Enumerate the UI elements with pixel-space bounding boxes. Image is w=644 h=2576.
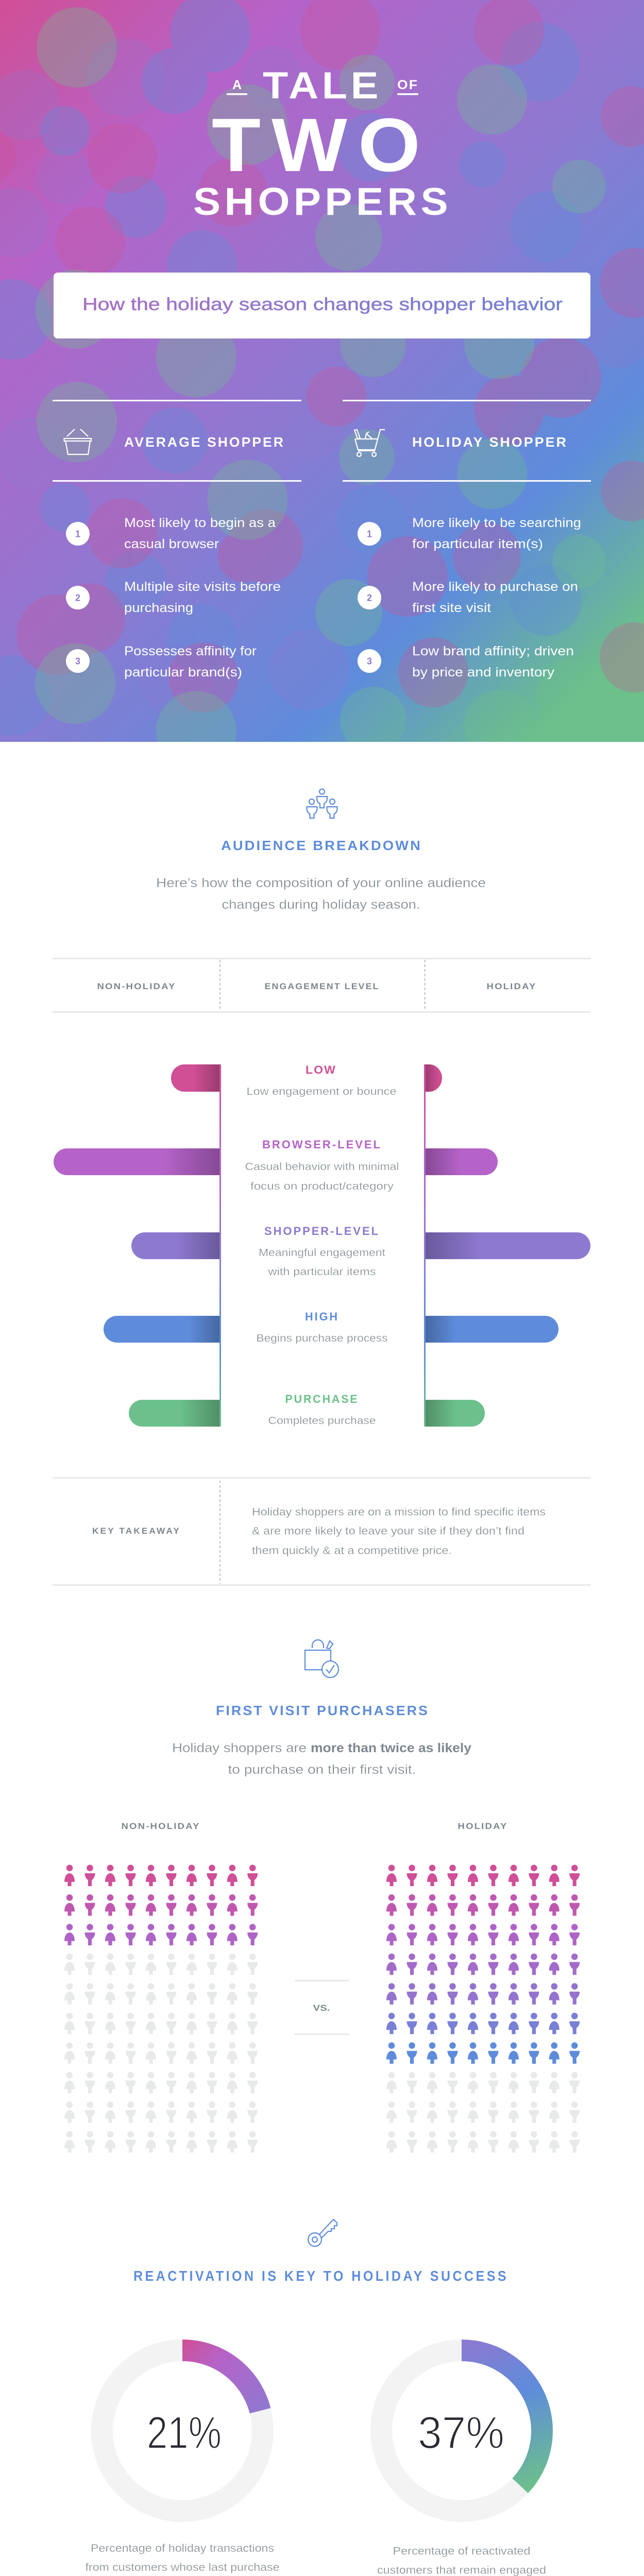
chart: donut 21% xyxy=(86,2350,279,2576)
title: TWO xyxy=(212,103,431,188)
chart: non-holiday pictogram: NON-HOLIDAY xyxy=(122,1821,200,1831)
labels: engagement levels: BROWSER-LEVEL xyxy=(262,1138,382,1151)
panel: average shopper: purchasing xyxy=(124,601,193,615)
panel: key takeaway: KEY TAKEAWAY xyxy=(92,1526,181,1536)
panel: average shopper: 3 xyxy=(75,656,80,667)
panel: holiday shopper: More likely to be searching xyxy=(412,516,581,530)
panel: average shopper: Most likely to begin as a xyxy=(124,516,276,530)
title: SHOPPERS xyxy=(193,180,452,223)
title: A xyxy=(232,78,242,92)
panel: average shopper: 1 xyxy=(75,529,80,539)
heading: first visit purchasers: FIRST VISIT PURCHASERS xyxy=(216,1703,429,1718)
chart: donut 37%: Percentage of reactivated xyxy=(393,2545,531,2557)
table header xyxy=(53,958,591,1013)
chart: donut 37%: 37% xyxy=(418,2407,504,2458)
versus divider: VS. xyxy=(313,2003,330,2013)
panel: hero background xyxy=(0,0,644,742)
panel: holiday shopper xyxy=(343,400,591,680)
panel: holiday shopper: 2 xyxy=(367,592,372,603)
panel: holiday shopper: More likely to purchase on xyxy=(412,580,578,594)
title xyxy=(193,65,452,223)
panel: holiday shopper: first site visit xyxy=(412,601,491,615)
table header: NON-HOLIDAY xyxy=(97,981,176,991)
panel: holiday shopper: 1 xyxy=(367,529,372,539)
bar: low xyxy=(171,1064,442,1092)
panel: average shopper: Possesses affinity for xyxy=(124,644,257,658)
panel: key takeaway xyxy=(53,1477,591,1586)
panel: average shopper: AVERAGE SHOPPER xyxy=(124,434,285,450)
chart: non-holiday pictogram xyxy=(64,1821,258,2153)
icon: cart xyxy=(354,430,385,456)
panel: average shopper: casual browser xyxy=(124,537,219,551)
panel: average shopper: particular brand(s) xyxy=(124,665,242,680)
labels: engagement levels: Begins purchase process xyxy=(257,1333,387,1344)
chart: donut 37% xyxy=(377,2350,546,2576)
text: audience intro: changes during holiday season. xyxy=(222,897,420,912)
text: audience intro xyxy=(156,876,486,912)
title: TALE xyxy=(263,65,382,107)
labels: engagement levels: LOW xyxy=(306,1063,336,1076)
panel: average shopper xyxy=(53,400,301,680)
bar: shopper-level xyxy=(131,1232,590,1259)
table header: HOLIDAY xyxy=(486,981,537,991)
title: OF xyxy=(397,78,418,92)
bar: purchase xyxy=(129,1400,485,1427)
icon: shopping bag with check xyxy=(305,1640,338,1677)
labels: engagement levels: with particular items xyxy=(267,1266,376,1278)
heading: audience breakdown: AUDIENCE BREAKDOWN xyxy=(221,838,422,853)
chart: holiday pictogram xyxy=(386,1821,580,2153)
panel: holiday shopper: HOLIDAY SHOPPER xyxy=(412,434,568,450)
labels: engagement levels: PURCHASE xyxy=(285,1393,359,1405)
panel: average shopper: 2 xyxy=(75,592,80,603)
subtitle card: How the holiday season changes shopper behavior xyxy=(82,295,563,314)
subtitle card xyxy=(54,273,590,338)
labels: engagement levels: Casual behavior with minimal xyxy=(245,1161,399,1173)
panel: holiday shopper: Low brand affinity; driven xyxy=(412,644,574,658)
text: first visit intro: Holiday shoppers are xyxy=(172,1741,307,1755)
panel: average shopper: Multiple site visits before xyxy=(124,580,281,594)
versus divider xyxy=(295,1980,349,2035)
table header: ENGAGEMENT LEVEL xyxy=(265,981,379,991)
labels: engagement levels: Low engagement or bounce xyxy=(246,1086,397,1097)
labels: engagement levels: HIGH xyxy=(305,1310,339,1323)
labels: engagement levels: focus on product/category xyxy=(250,1181,394,1192)
chart: donut 21%: from customers whose last purchase xyxy=(86,2562,279,2573)
text: first visit intro xyxy=(172,1741,471,1777)
heading: reactivation: REACTIVATION IS KEY TO HOLIDAY SUCCESS xyxy=(133,2268,509,2284)
labels: engagement levels: SHOPPER-LEVEL xyxy=(264,1225,380,1238)
panel: key takeaway: Holiday shoppers are on a mission to find specific items xyxy=(252,1506,546,1518)
chart: donut 21%: Percentage of holiday transactions xyxy=(91,2543,274,2554)
panel: key takeaway: & are more likely to leave your site if they don’t find xyxy=(252,1525,524,1537)
bar: browser-level xyxy=(54,1148,498,1175)
chart: engagement level butterfly bars xyxy=(54,1063,590,1427)
text: first visit intro: more than twice as likely xyxy=(311,1741,471,1755)
panel: key takeaway: them quickly & at a competitive price. xyxy=(252,1545,452,1557)
labels: engagement levels: Completes purchase xyxy=(268,1415,376,1427)
icon: basket xyxy=(64,429,91,454)
labels: engagement levels: Meaningful engagement xyxy=(259,1247,385,1259)
text: audience intro: Here’s how the composition of your online audience xyxy=(156,876,486,890)
chart: donut 21%: 21% xyxy=(147,2407,222,2458)
panel: holiday shopper: by price and inventory xyxy=(412,665,555,680)
labels: engagement levels xyxy=(245,1063,399,1427)
text: first visit intro: to purchase on their first visit. xyxy=(228,1762,416,1777)
icon: audience people xyxy=(307,789,337,818)
icon: key xyxy=(308,2219,337,2246)
chart: holiday pictogram: HOLIDAY xyxy=(457,1821,508,1831)
bar: high xyxy=(104,1316,558,1343)
chart: donut 37%: customers that remain engaged xyxy=(377,2565,546,2576)
panel: holiday shopper: for particular item(s) xyxy=(412,537,543,551)
panel: holiday shopper: 3 xyxy=(367,656,372,667)
